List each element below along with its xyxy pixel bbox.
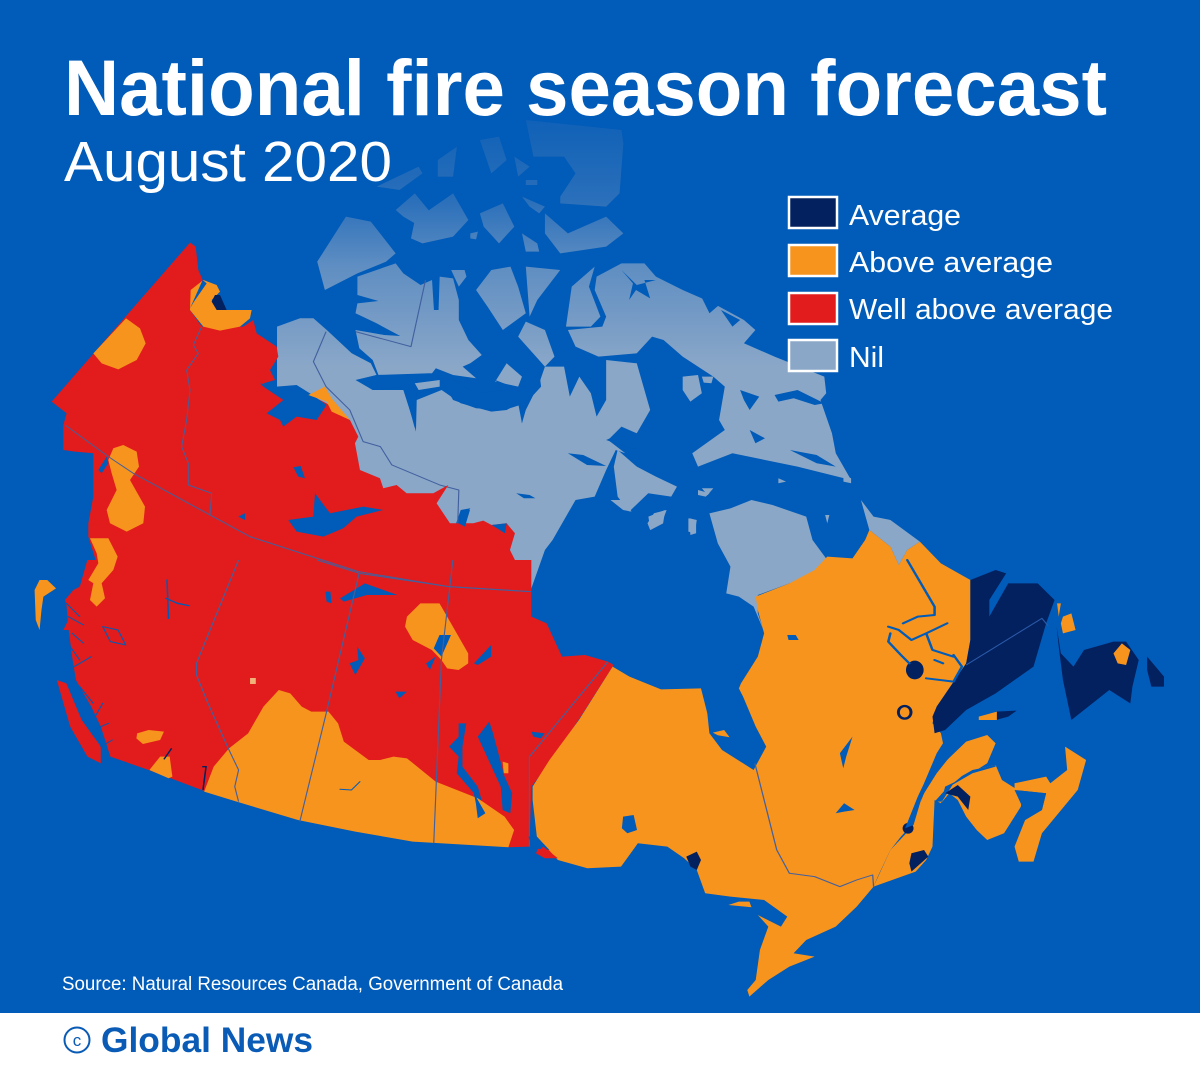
legend item: average: Average — [849, 200, 961, 232]
blob: Mackenzie delta — [190, 280, 252, 331]
BC coast inlets — [66, 603, 126, 747]
blob: Manitoba and Saskatchewan — [405, 603, 468, 670]
region: well above average north — [52, 243, 530, 630]
boundary: 60th parallel and territories — [65, 425, 530, 592]
title: National fire season forecast — [64, 43, 1107, 132]
legend item: well above average: Well above average — [849, 294, 1113, 326]
patches: average small — [686, 852, 701, 870]
region: average Newfoundland — [1057, 627, 1139, 720]
region: nil northern Quebec — [610, 500, 920, 632]
region: nil arctic — [277, 120, 851, 610]
map of Canada — [35, 120, 1164, 997]
boundary: Victoria Island — [355, 280, 426, 347]
subtitle: August 2020 — [64, 130, 392, 194]
region: Gaspe and south shore — [874, 735, 996, 887]
Quebec lakes and rivers — [622, 815, 637, 833]
blob: northern BC — [88, 538, 118, 607]
boundaries: western provinces — [196, 560, 239, 802]
region: Nova Scotia — [1015, 747, 1086, 862]
blob: northern Yukon — [93, 318, 146, 369]
St Lawrence — [905, 747, 958, 828]
icon: copyright — [64, 1028, 90, 1052]
legend — [789, 197, 1113, 374]
Manitoba lakes — [478, 722, 512, 813]
icon: delta average patch — [212, 295, 227, 310]
region: above average Yukon and northwest — [65, 280, 530, 607]
lake: Great Bear — [260, 383, 327, 427]
legend item: above average: Above average — [849, 247, 1053, 279]
boundary: Ontario and Quebec — [755, 763, 874, 887]
region: above average prairies — [35, 560, 608, 847]
island: Haida Gwaii — [35, 580, 56, 630]
small fire patch — [250, 678, 256, 684]
island: Vancouver — [57, 680, 101, 763]
boundary: Nunavut — [313, 332, 459, 550]
legend item: average — [789, 197, 961, 232]
legend item: nil — [789, 340, 884, 374]
lake: Athabasca — [340, 583, 397, 602]
region: average Labrador — [932, 570, 1055, 733]
band: southern prairies — [204, 690, 514, 847]
region: New Brunswick — [941, 765, 1023, 840]
brand name: Global News — [101, 1021, 313, 1060]
region: above average Ontario and Quebec — [528, 530, 1164, 997]
legend item: above average — [789, 245, 1053, 279]
region: well above average south — [57, 560, 614, 858]
footer — [0, 1013, 1200, 1070]
legend item: nil: Nil — [849, 342, 884, 374]
source note: Source: Natural Resources Canada, Government of Canada — [62, 974, 563, 995]
lake: Great Slave — [288, 493, 383, 537]
blobs: southern BC — [136, 730, 164, 744]
blob: dumbbell — [107, 445, 145, 532]
blob: NWT east — [308, 387, 350, 420]
icon: copyright: c — [73, 1031, 82, 1050]
